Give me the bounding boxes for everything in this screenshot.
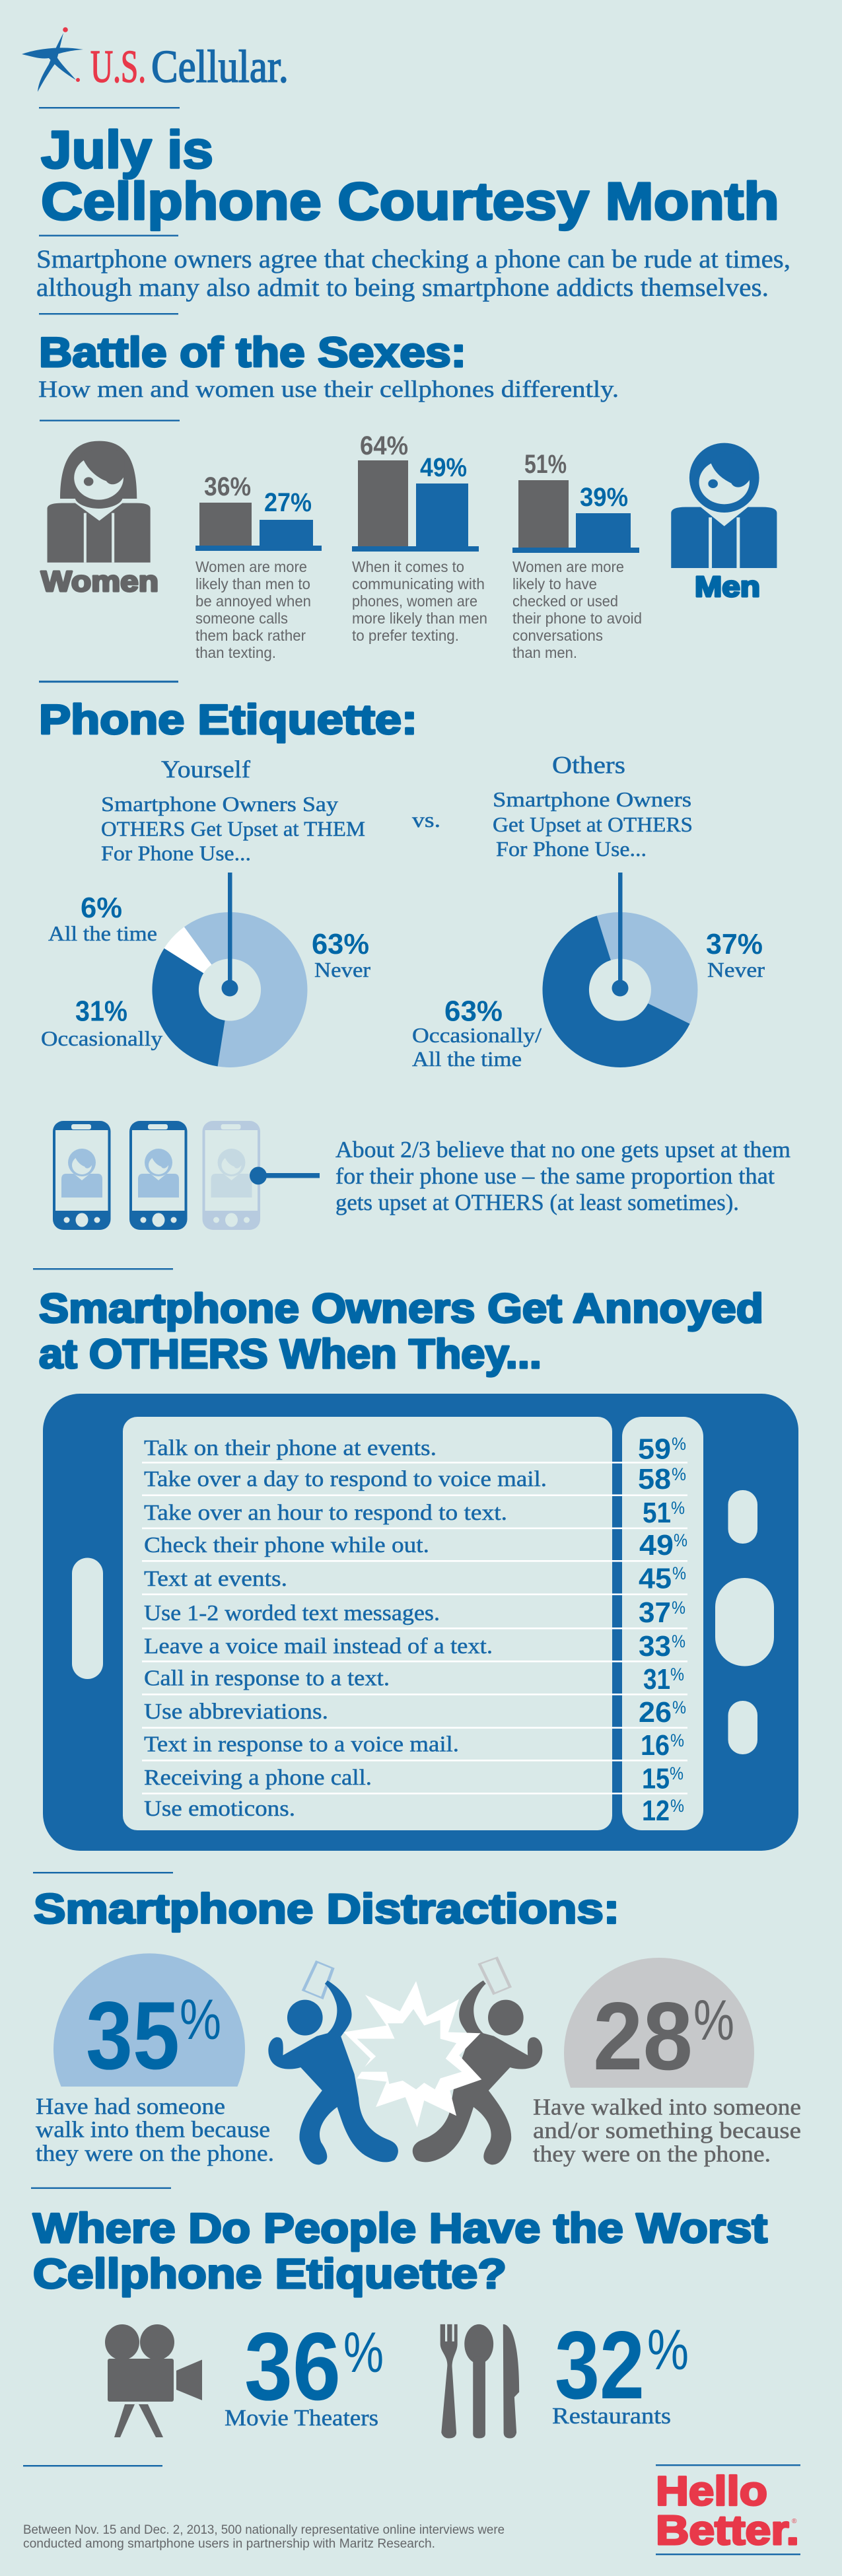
list percentages: % [672, 1464, 686, 1484]
bar chart: callbacks: 27% [264, 488, 312, 517]
column heading: Others: Others [552, 752, 625, 779]
list labels: Receiving a phone call. [144, 1766, 372, 1790]
text: prefer texting: to prefer texting. [352, 627, 459, 644]
list percentages: 37 [639, 1596, 671, 1629]
text: callbacks: them back rather [195, 627, 306, 644]
list labels: Text in response to a voice mail. [144, 1732, 459, 1757]
footnote [23, 2523, 505, 2551]
list percentages: 12 [642, 1795, 670, 1827]
text: 28%: and/or something because [533, 2118, 801, 2143]
text: 35% [36, 2094, 274, 2166]
heading: Phone Etiquette: Phone Etiquette: [39, 697, 417, 743]
question: Others: Get Upset at OTHERS [493, 812, 693, 836]
text: avoid conversations: checked or used [512, 592, 618, 610]
list percentages: % [670, 1796, 684, 1816]
heading: Battle of the Sexes: Battle of the Sexes: [39, 330, 466, 376]
heading: Smartphone Owners Get Annoyed: at OTHERS When They... [39, 1332, 542, 1377]
icon: phone 2 [129, 1121, 188, 1230]
label: 6% all the time: 6% [81, 892, 122, 924]
illustration: colliding figures [268, 1958, 542, 2165]
question: Others [493, 787, 693, 861]
text: avoid conversations: their phone to avoid [512, 610, 642, 627]
text: avoid conversations [512, 558, 642, 661]
list labels: Take over a day to respond to voice mail. [144, 1467, 547, 1491]
list labels: Use emoticons. [144, 1797, 295, 1821]
bar chart: prefer texting [352, 431, 479, 552]
donut chart: yourself [152, 873, 307, 1067]
stat: 36% movie theaters: % [343, 2321, 384, 2384]
stat: 32% restaurants: 32 [555, 2311, 645, 2419]
logo: Hello Better: Better. [656, 2508, 799, 2554]
list percentages [638, 1433, 687, 1827]
stat: 32% restaurants: % [647, 2318, 689, 2382]
intro text [36, 245, 790, 302]
text: avoid conversations: likely to have [512, 575, 597, 592]
bar chart: prefer texting: 49% [420, 453, 467, 482]
stat: 35%: 35 [86, 1982, 180, 2089]
bar chart: callbacks [195, 472, 322, 551]
list percentages: % [670, 1731, 684, 1750]
logo: Hello Better: ® [792, 2518, 797, 2525]
text: callbacks: than texting. [195, 644, 276, 661]
label: 63% never [312, 928, 370, 982]
list percentages: 58 [638, 1463, 671, 1495]
list labels: Use 1-2 worded text messages. [144, 1601, 440, 1626]
icon: cutlery [440, 2324, 519, 2439]
text: callbacks: likely than men to [195, 575, 310, 592]
panel: phone list [43, 1394, 798, 1851]
text: callbacks: Women are more [195, 558, 307, 575]
intro text: although many also admit to being smartphone addicts themselves. [36, 273, 769, 302]
label: 6% all the time: All the time [48, 921, 157, 945]
list labels: Leave a voice mail instead of a text. [144, 1634, 493, 1659]
bar chart: avoid conversations: 39% [580, 483, 628, 512]
text: avoid conversations: conversations [512, 627, 603, 644]
list percentages: 15 [642, 1762, 670, 1795]
text: callbacks [195, 558, 311, 661]
donut chart: others [543, 873, 698, 1067]
list percentages: % [672, 1698, 686, 1717]
icon: woman [48, 441, 151, 563]
list percentages: 26 [639, 1696, 672, 1729]
heading: Where Do People: Cellphone Etiquette? [33, 2251, 507, 2297]
column heading: Yourself: Yourself [161, 756, 251, 783]
text: 35%: walk into them because [36, 2116, 270, 2143]
title: July is [41, 120, 213, 179]
label: 63% never: 63% [312, 928, 369, 960]
label: 31% occasionally: Occasionally [41, 1026, 162, 1050]
label: 6% all the time [48, 892, 157, 945]
heading: Smartphone Owners Get Annoyed: Smartphone Owners Get Annoyed [39, 1286, 763, 1332]
bar chart: avoid conversations: 51% [524, 450, 567, 479]
text: avoid conversations: Women are more [512, 558, 624, 575]
icon: phone 3 faded [202, 1121, 260, 1230]
stat: 36% movie theaters: Movie Theaters [225, 2405, 378, 2431]
label: 31% occasionally [41, 995, 162, 1050]
text: 35%: they were on the phone. [36, 2140, 274, 2166]
list percentages: % [671, 1498, 685, 1518]
stat: 28% [564, 1958, 754, 2090]
footnote: conducted among smartphone users in partnership with Maritz Research. [23, 2537, 435, 2551]
stat: 36% movie theaters: 36 [244, 2312, 341, 2420]
bar chart: callbacks: 36% [204, 472, 251, 501]
text: 28% [533, 2094, 801, 2166]
title [41, 120, 779, 231]
list percentages: % [672, 1598, 685, 1618]
logo: U.S. Cellular: U.S. [90, 42, 146, 92]
list percentages: % [672, 1631, 685, 1651]
callout text: gets upset at OTHERS (at least sometimes). [335, 1190, 739, 1215]
stat: 36% movie theaters [225, 2312, 384, 2431]
text: prefer texting [352, 558, 487, 644]
subheading: How men and women use their cellphones differently. [38, 376, 619, 402]
question: Others: For Phone Use... [496, 837, 647, 861]
bar chart: avoid conversations [512, 450, 639, 553]
icon: movie camera [105, 2324, 202, 2437]
list labels [144, 1436, 547, 1821]
text: prefer texting: communicating with [352, 575, 485, 592]
icon: phone 1 [53, 1121, 111, 1230]
text: prefer texting: more likely than men [352, 610, 487, 627]
text: 28%: Have walked into someone [533, 2094, 801, 2120]
label: 31% occasionally: 31% [75, 995, 127, 1028]
label: Men: Men [695, 571, 760, 603]
question: Others: Smartphone Owners [493, 787, 691, 811]
callout text: for their phone use – the same proportion that [335, 1163, 775, 1189]
text: 35%: Have had someone [36, 2094, 225, 2119]
callout text [335, 1137, 790, 1215]
label: 37% never [706, 928, 765, 982]
vs.: vs. [412, 808, 440, 832]
question: Yourself: Smartphone Owners Say [101, 792, 338, 816]
logo: Hello Better: Hello [656, 2469, 767, 2514]
question: Yourself: OTHERS Get Upset at THEM [101, 816, 365, 840]
list percentages: 45 [639, 1563, 672, 1594]
title: Cellphone Courtesy Month [41, 172, 779, 231]
heading: Smartphone Distractions: Smartphone Distractions: [34, 1886, 619, 1933]
list percentages: % [670, 1764, 684, 1783]
list percentages: 31 [643, 1663, 670, 1696]
heading: Smartphone Owners Get Annoyed [39, 1286, 763, 1377]
list labels: Take over an hour to respond to text. [144, 1501, 507, 1525]
logo: Hello Better [656, 2464, 800, 2555]
list percentages: 33 [639, 1630, 671, 1663]
heading: Where Do People [33, 2205, 767, 2297]
question: Yourself [101, 792, 365, 865]
list labels: Text at events. [144, 1567, 287, 1591]
text: callbacks: someone calls [195, 610, 288, 627]
list labels: Call in response to a text. [144, 1666, 390, 1691]
label: 63% occasionally: All the time [412, 1047, 522, 1071]
list percentages: % [670, 1664, 684, 1684]
label: 37% never: 37% [706, 928, 763, 960]
label: 37% never: Never [707, 958, 765, 982]
label: Women: Women [41, 565, 158, 598]
callout text: About 2/3 believe that no one gets upset at them [335, 1137, 790, 1163]
list percentages: 51 [643, 1497, 671, 1529]
list percentages: % [672, 1563, 686, 1583]
connector [250, 1166, 320, 1185]
intro text: Smartphone owners agree that checking a phone can be rude at times, [36, 245, 790, 273]
footnote: Between Nov. 15 and Dec. 2, 2013, 500 nationally representative online interviews were [23, 2523, 505, 2537]
list labels: Talk on their phone at events. [144, 1436, 437, 1460]
bar chart: prefer texting: 64% [360, 431, 408, 460]
list percentages: % [672, 1434, 686, 1454]
text: prefer texting: phones, women are [352, 592, 477, 610]
text: avoid conversations: than men. [512, 644, 577, 661]
list labels: Check their phone while out. [144, 1533, 429, 1557]
list percentages: 49 [639, 1529, 674, 1561]
stat: 35% [53, 1953, 245, 2089]
logo: U.S. Cellular [22, 27, 289, 92]
stat: 32% restaurants: Restaurants [552, 2403, 671, 2429]
heading: Where Do People: Where Do People Have the Worst [33, 2205, 767, 2252]
icon: man [671, 443, 777, 568]
logo: U.S. Cellular: Cellular. [151, 42, 289, 92]
question: Yourself: For Phone Use... [101, 841, 251, 865]
list percentages: % [674, 1530, 687, 1550]
label: 63% occasionally: Occasionally/ [412, 1023, 542, 1047]
text: prefer texting: When it comes to [352, 558, 464, 575]
stat: 28%: % [693, 1989, 734, 2052]
label: 63% occasionally [412, 995, 542, 1071]
list percentages: 16 [641, 1729, 670, 1762]
stat: 28%: 28 [593, 1982, 693, 2090]
list percentages: 59 [638, 1433, 671, 1465]
text: callbacks: be annoyed when [195, 592, 311, 610]
label: 63% never: Never [314, 958, 370, 982]
text: 28%: they were on the phone. [533, 2141, 771, 2166]
stat: 35%: % [180, 1988, 221, 2052]
label: 63% occasionally: 63% [444, 995, 503, 1028]
list labels: Use abbreviations. [144, 1699, 328, 1724]
